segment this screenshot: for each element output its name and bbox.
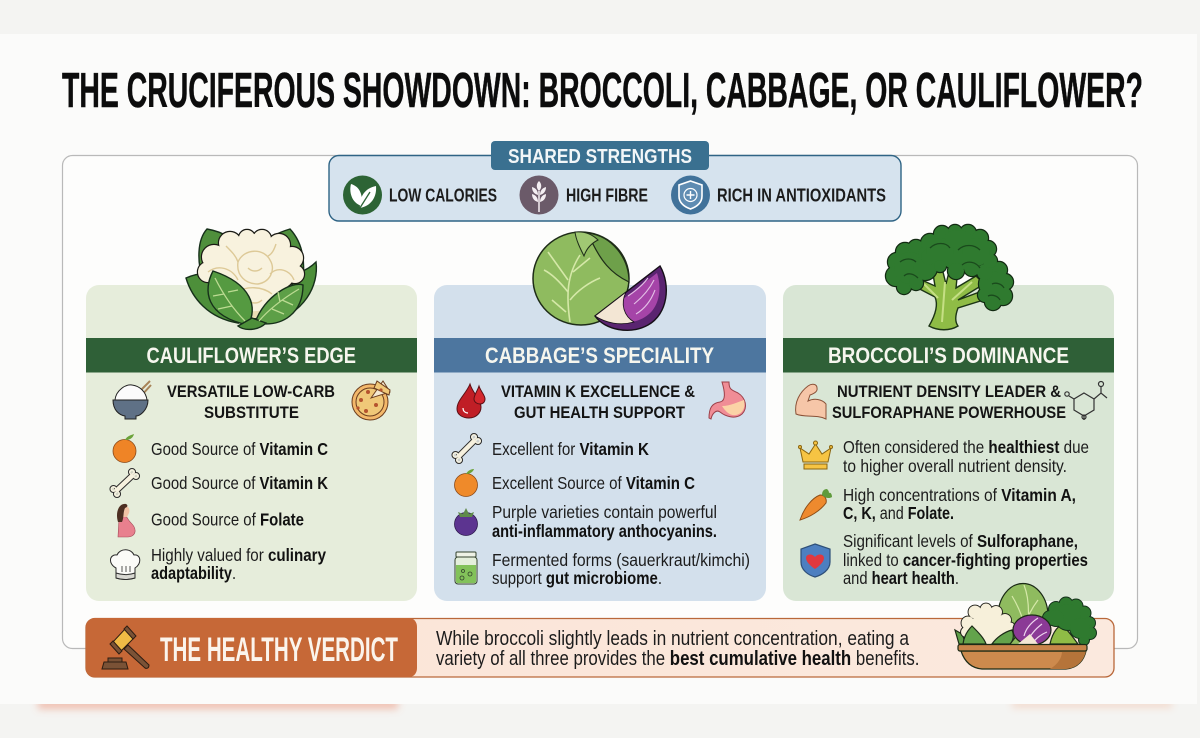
item: sulforaphane: Significant levels of Sulforaphane, [843,531,1078,551]
icon: rice bowl [113,381,151,419]
item: vitamin k: Good Source of Vitamin K [151,473,328,493]
cabbage header [434,338,766,372]
high fibre label: HIGH FIBRE [566,186,648,206]
item: vitamin k [113,471,328,495]
item: folate: Good Source of Folate [151,510,304,530]
item: vitamin k [455,436,649,461]
icon: carrot [800,489,832,520]
icon: bone [455,436,479,461]
icon: fermentation jar [455,552,477,584]
icon: heart shield [801,544,830,577]
icon: leaf [343,176,382,214]
panel: shared strengths [329,141,901,221]
item: sulforaphane [801,531,1088,588]
cauliflower header [86,338,417,372]
item: healthiest: Often considered the healthiest due [843,437,1089,457]
verdict label: THE HEALTHY VERDICT [160,631,398,669]
icon: molecule [1065,382,1107,420]
item: gut microbiome: Fermented forms (sauerkraut/kimchi) [492,550,750,570]
broccoli header [783,338,1114,372]
panel: cauliflower [86,229,417,601]
verdict text [436,628,920,670]
panel: broccoli [783,225,1114,601]
main frame [62,156,1138,648]
cauliflower subheading [167,382,335,422]
item: sulforaphane: and heart health. [843,568,959,588]
cabbage subheading: VITAMIN K EXCELLENCE & [501,382,695,401]
item: folate [117,504,304,537]
icon: purple fruit [454,508,478,536]
cauliflower subheading: SUBSTITUTE [204,403,299,422]
item: anthocyanins [454,502,717,541]
icon: shield plus [671,176,710,214]
icon: bone [113,471,137,495]
illustration: vegetable bowl [955,584,1096,669]
item: gut microbiome: support gut microbiome. [492,568,662,588]
icon: crown [798,441,832,469]
item: vitamin c: Excellent Source of Vitamin C [492,473,695,493]
icon: stomach [709,382,745,419]
low calories label: LOW CALORIES [389,186,497,206]
item: healthiest: to higher overall nutrient density. [843,456,1067,476]
item: vitamin c [454,469,695,496]
rich in antioxidants label: RICH IN ANTIOXIDANTS [717,186,886,206]
broccoli subheading [832,382,1066,422]
icon: flexed arm [796,384,826,419]
cabbage subheading [501,382,695,422]
verdict bar [86,584,1114,677]
item: vitamin k: Excellent for Vitamin K [492,439,649,459]
item: culinary adaptability: Highly valued for culinary [151,545,326,565]
icon: pregnant woman [117,504,135,537]
shared strengths tab: SHARED STRENGTHS [508,146,692,168]
icon: orange [113,434,136,462]
verdict label [86,618,417,677]
icon: pizza [352,381,390,420]
verdict text: variety of all three provides the best cumulative health benefits. [436,648,920,670]
item: vitamins [800,485,1076,523]
illustration: broccoli [886,225,1013,330]
item: anthocyanins: anti-inflammatory anthocyanins. [492,521,717,541]
illustration: cabbage [533,232,666,330]
illustration: cauliflower [186,229,316,329]
item: vitamins: C, K, and Folate. [843,503,954,523]
icon: blood drop [457,384,485,418]
item: vitamin c [113,434,328,462]
icon: gavel [102,626,149,669]
item: gut microbiome [455,550,750,588]
broccoli subheading: NUTRIENT DENSITY LEADER & [837,382,1061,401]
item: healthiest [798,437,1089,476]
cauliflower subheading: VERSATILE LOW-CARB [167,382,335,401]
item: vitamins: High concentrations of Vitamin A, [843,485,1076,505]
cauliflower header: CAULIFLOWER’S EDGE [146,343,356,368]
item: culinary adaptability: adaptability. [151,563,236,583]
item: anthocyanins: Purple varieties contain powerful [492,502,717,522]
item: culinary adaptability [110,545,326,583]
shared strengths tab [491,141,709,170]
icon: wheat [520,176,558,214]
cabbage subheading: GUT HEALTH SUPPORT [514,403,686,422]
broccoli header: BROCCOLI’S DOMINANCE [828,343,1069,368]
item: sulforaphane: linked to cancer-fighting properties [843,550,1088,570]
panel: cabbage [434,232,766,601]
icon: orange [454,469,478,496]
broccoli subheading: SULFORAPHANE POWERHOUSE [832,403,1066,422]
verdict text: While broccoli slightly leads in nutrient concentration, eating a [436,628,910,650]
cabbage header: CABBAGE’S SPECIALITY [485,343,714,368]
icon: chef hat [110,550,140,580]
item: vitamin c: Good Source of Vitamin C [151,439,328,459]
